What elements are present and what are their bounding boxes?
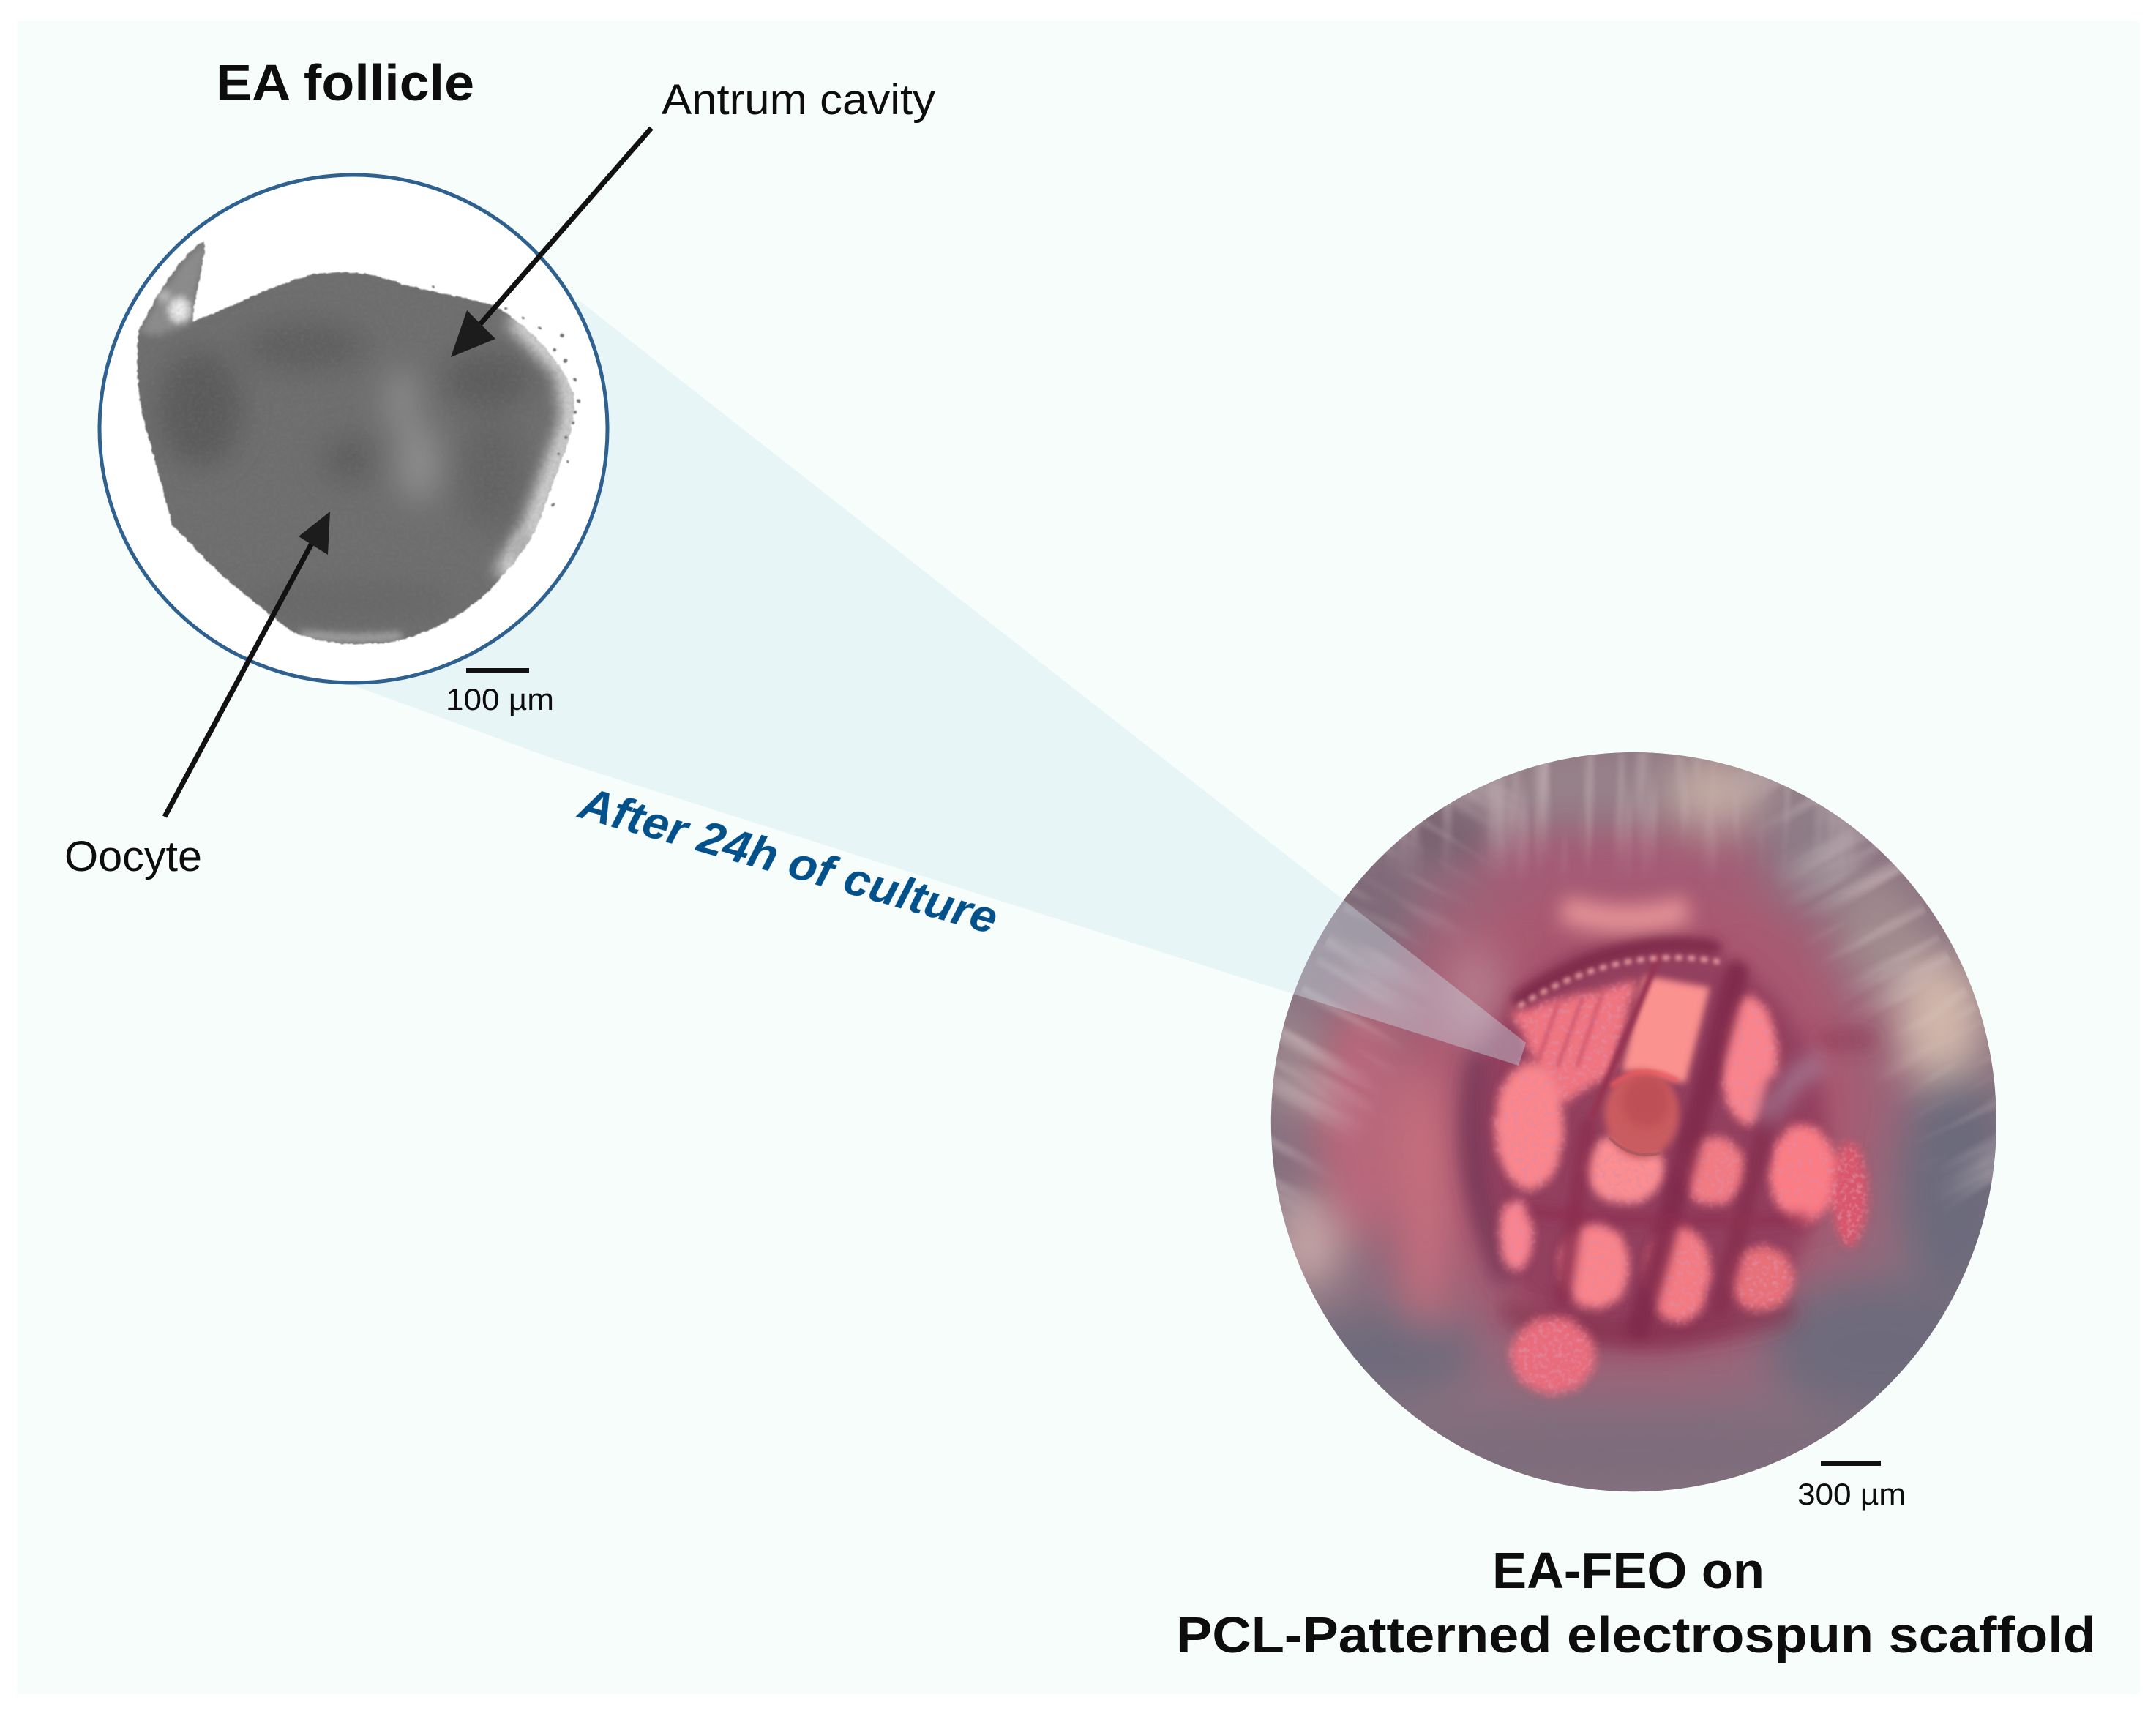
heading: EA-FEO on PCL-Patterned electrospun scaffold xyxy=(1176,1542,2096,1663)
label: After 24h of culture: After 24h of culture xyxy=(572,778,1003,944)
scale bar: 100 µm xyxy=(446,668,554,716)
heading: EA-FEO on PCL-Patterned electrospun scaffold: PCL-Patterned electrospun scaffold xyxy=(1176,1606,2096,1663)
top fibre edge highlights xyxy=(1519,958,1720,1006)
scale bar: 300 µm xyxy=(1797,1461,1906,1511)
label: Oocyte: Oocyte xyxy=(64,833,202,880)
follicle image xyxy=(136,241,581,645)
circle background xyxy=(100,175,607,683)
scaffold fibres xyxy=(1519,945,1803,1328)
bright scaffold pores xyxy=(1495,981,1867,1394)
central bright window xyxy=(1622,976,1710,1083)
projection wedge xyxy=(344,299,1526,1066)
label: Antrum cavity: Antrum cavity xyxy=(662,76,935,124)
micrograph: EA-FEO on scaffold xyxy=(1270,752,1996,1491)
fibrous rim streaks xyxy=(1272,752,1996,1220)
arrow: to antrum cavity xyxy=(451,128,651,357)
side highlight xyxy=(1764,1060,1822,1122)
arrow: to oocyte xyxy=(165,512,330,817)
heading: EA follicle: EA follicle xyxy=(216,54,474,111)
heading: EA-FEO on PCL-Patterned electrospun scaffold: EA-FEO on xyxy=(1492,1542,1764,1599)
speckled cell debris xyxy=(433,285,581,506)
scale bar: 100 µm: 100 µm xyxy=(446,682,554,716)
scale bar: 300 µm: 300 µm xyxy=(1797,1477,1906,1511)
circle: EA follicle micrograph xyxy=(100,175,607,683)
oocyte xyxy=(1604,1070,1679,1158)
